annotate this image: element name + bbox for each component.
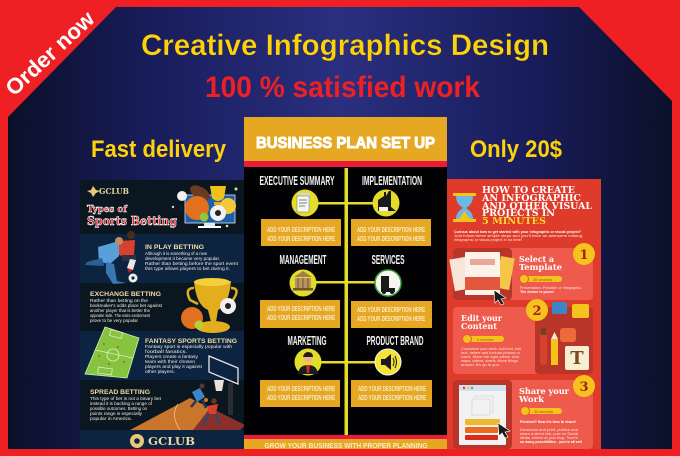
header band [244,117,447,167]
description box: ADD YOUR DESCRIPTION HERE [357,234,425,243]
number badge 3 [573,375,595,397]
text block: in play betting: this type allows players to bet during it. [145,266,230,271]
section: management [260,253,340,328]
description box [351,301,432,328]
description box: ADD YOUR DESCRIPTION HERE [267,234,335,243]
illustration: football players [85,231,138,284]
illustration: basketball hoop [209,356,238,415]
text: step 1 description: The choice is yours! [520,290,554,294]
text block: exchange betting: opposite side. The extra excitement [90,313,151,318]
panel: sports betting infographic [80,180,245,449]
heading: how to create: PROJECTS IN [482,209,555,219]
description box [260,300,340,328]
text block: in play betting [145,244,239,271]
icon: hourglass [453,193,476,222]
icon: bank building [290,270,316,296]
text block: fantasy sports betting: Players create a fantasy [145,354,199,359]
text block: fantasy sports betting: other players. [145,369,175,374]
illustration: football pitch [85,327,139,378]
text block: intro: Just follow these simple steps and you'll have an awesome looking [454,234,582,238]
illustration: paint pots, brush, pencil, letter block: T [570,348,584,369]
section: services [351,253,432,328]
heading: how to create: AN INFOGRAPHIC [481,194,581,204]
description box [261,219,341,246]
description box: ADD YOUR DESCRIPTION HERE [358,393,426,402]
section: management: MANAGEMENT [280,253,327,267]
text: share your work [518,386,570,404]
description box: ADD YOUR DESCRIPTION HERE [357,225,425,234]
logo: gclub top [87,186,129,197]
number badge 1: 1 [579,248,589,263]
text block: fantasy sports betting: FANTASY SPORTS BETTING [145,338,237,345]
text block: spread betting: points range is especially [90,411,143,416]
corner ribbon text: Order now [0,5,100,101]
timer pill: 4 minutes [477,338,494,342]
section: executive summary: EXECUTIVE SUMMARY [260,174,335,188]
timer pill: 30 seconds [533,278,552,282]
heading: types of sports betting: Types of [87,204,128,215]
description box: ADD YOUR DESCRIPTION HERE [358,384,426,393]
description box: ADD YOUR DESCRIPTION HERE [267,304,335,313]
section: product brand [351,334,432,407]
text: step 2 description: maps, videos, charts. Move things [461,359,518,363]
illustration: basketball court and players [130,384,245,430]
text: step 3 description: Finished? Now it's time to share! [520,420,576,424]
text: step 2 description: around. It's up to you. [461,363,500,367]
text block: fantasy sports betting: team with their chosen [145,359,196,364]
section: marketing: MARKETING [288,334,326,348]
heading: how to create: 5 MINUTES [482,217,546,227]
text: step 2 description: Customize your work. Add text, edit [461,347,521,351]
number badge 2: 2 [532,304,542,319]
description box: ADD YOUR DESCRIPTION HERE [357,305,425,314]
description box [260,380,340,407]
description box [351,380,432,407]
section: implementation [351,174,431,246]
central timeline [316,168,378,435]
timer pill [520,406,562,416]
text block: intro [454,230,582,242]
heading: how to create: HOW TO CREATE [482,186,575,196]
heading: types of sports betting [87,204,178,228]
description box [351,219,431,246]
text: select a template [519,254,562,272]
heading: how to create [481,186,593,227]
icon: documents [292,190,318,216]
section: services: SERVICES [372,253,404,267]
text block: fantasy sports betting: players and play it against [145,364,203,369]
text block: fantasy sports betting: Fantasy sport is especially popular with [145,344,233,349]
timer pill [520,274,562,284]
text block: spread betting: instead it is backing a range of [90,401,153,406]
text: share your work: Work [518,394,544,404]
description box: ADD YOUR DESCRIPTION HERE [357,314,425,323]
section: product brand: PRODUCT BRAND [366,334,424,348]
illustration: template sheets [449,252,515,305]
text: step 2 description: icons. Move the right colors. Add [461,355,519,359]
text: share your work: Share your [519,386,570,396]
text block: in play betting: development it became very popular. [145,256,220,261]
icon: forklift [375,270,401,296]
number badge 3: 3 [579,380,589,395]
illustration: browser window with buttons [459,385,510,445]
section: implementation: IMPLEMENTATION [362,174,422,188]
text: edit your content [461,313,503,331]
card: step 1 select a template [449,243,595,305]
description box: ADD YOUR DESCRIPTION HERE [267,225,335,234]
text block: in play betting: IN PLAY BETTING [145,244,204,251]
text: step 3 description: Media, embed on your blog. There's [520,436,578,440]
text: select a template: Template [519,262,562,272]
red frame bottom edge [0,449,680,456]
card: step 3 share your work [453,375,595,449]
text block: exchange betting: bookmaker's odds place bet against [90,303,163,308]
icon: monitor with sports balls [172,182,238,228]
text block: fantasy sports betting: football fanatics. [145,349,187,354]
text: step 3 description: share a direct link, post on Social [520,432,578,436]
panel: how to create an infographic [447,179,601,449]
subtitle: 100 % satisfied work [205,71,480,104]
text block: exchange betting: Rather than betting on the [90,298,149,303]
text: edit your content: Edit your [461,313,503,323]
heading: how to create: AND OTHER VISUAL [481,202,593,212]
icon: trophy with balls [181,278,237,333]
text: step 1 description [520,286,582,294]
text: step 3 description [520,420,582,444]
footer band [244,435,447,450]
logo: gclub bottom: GCLUB [148,435,195,448]
card: step 2 edit your content [453,299,593,374]
text block: spread betting: SPREAD BETTING [90,389,150,396]
text block: spread betting: popular in America. [90,416,132,421]
text block: spread betting [90,389,162,421]
text block: in play betting: Although it is something of a new [145,251,208,256]
label: fast delivery: Fast delivery [91,136,227,163]
logo: gclub bottom [130,434,195,448]
timer pill: 30 seconds [534,410,553,414]
text: step 1 description: Presentation, Printable or Infographic. [520,286,582,290]
text block: spread betting: This type of bet is not a binary bet [90,396,162,401]
section: marketing [260,334,340,407]
description box: ADD YOUR DESCRIPTION HERE [267,313,335,322]
text block: exchange betting: prove to be very popular [90,318,139,323]
header band: BUSINESS PLAN SET UP [256,135,435,152]
icon: businessman [294,348,322,376]
text block: spread betting: possible outcomes. Betting on [90,406,148,411]
icon: factory [372,190,400,216]
text: step 3 description: Download and print, publish and [520,428,578,432]
text block: intro: infographic or visual project in no time! [454,238,522,242]
panel: business plan set up [244,117,447,450]
text: step 3 description: so many possibilities - you're all set! [520,440,582,444]
text block: in play betting: Rather than betting before the sport event [145,261,239,266]
footer band: GROW YOUR BUSINESS WITH PROPER PLANNING [264,443,428,450]
text: edit your content: Content [461,321,497,331]
description box: ADD YOUR DESCRIPTION HERE [267,384,335,393]
text block: fantasy sports betting [145,338,237,374]
text block: exchange betting [90,291,163,323]
text block: exchange betting: EXCHANGE BETTING [90,291,161,298]
text: select a template: Select a [519,254,554,264]
icon: speaker [375,349,401,375]
logo: gclub top: GCLUB [99,186,129,196]
section: executive summary [260,174,341,246]
text: step 2 description [461,347,521,367]
title: Creative Infographics Design [141,29,549,62]
heading: types of sports betting: Sports Betting [87,214,178,228]
text: step 2 description: text, delete and include photos or [461,351,521,355]
number badge 1 [573,243,595,265]
text block: exchange betting: another player that is better the [90,308,151,313]
description box: ADD YOUR DESCRIPTION HERE [267,393,335,402]
text block: intro: Curious about how to get started with your infographic or visual project? [454,230,582,234]
label: price: Only 20$ [470,136,563,163]
